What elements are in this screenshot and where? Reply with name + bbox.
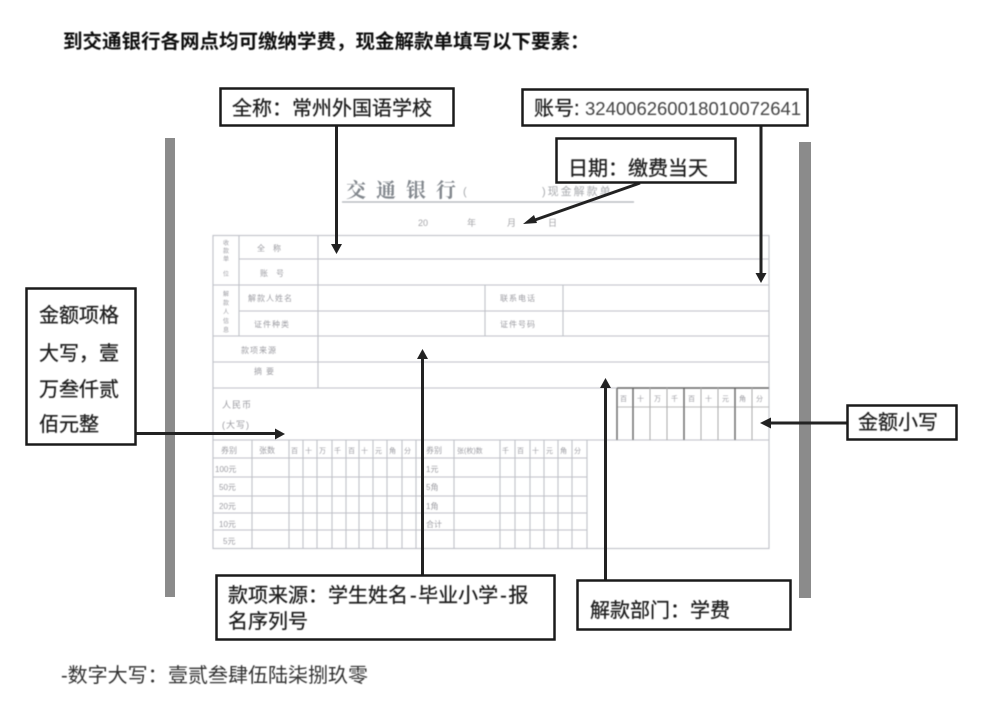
callout: payment department bbox=[578, 580, 790, 630]
form grid bbox=[213, 236, 769, 548]
form field labels: 百 bbox=[348, 447, 355, 455]
arrow: date bbox=[523, 183, 640, 224]
callout: amount in words: 大写，壹 bbox=[39, 342, 119, 365]
left gray bar bbox=[165, 138, 175, 597]
form field labels: (大写) bbox=[222, 419, 250, 430]
callout: account number: 账号: bbox=[534, 98, 580, 120]
form field labels: 十 bbox=[637, 394, 644, 403]
callout: account number: 324006260018010072641 bbox=[585, 98, 801, 119]
amount digit grid bbox=[617, 388, 769, 440]
form field labels: 款项来源 bbox=[241, 345, 277, 355]
arrow: account number bbox=[756, 126, 766, 283]
form field labels: 张数 bbox=[259, 445, 275, 455]
form field labels: 券别 bbox=[221, 445, 237, 455]
form field labels: 百 bbox=[517, 447, 524, 455]
form field labels: 解款人姓名 bbox=[248, 293, 293, 303]
callout: payment source: 款项来源：学生姓名-毕业小学-报 bbox=[228, 584, 528, 607]
form field labels bbox=[215, 239, 763, 546]
form field labels: 角 bbox=[389, 446, 396, 455]
right gray bar bbox=[799, 142, 811, 598]
arrow: payment source bbox=[417, 349, 428, 575]
callout: amount in words: 佰元整 bbox=[39, 413, 99, 436]
callout: payment source: 名序列号 bbox=[228, 610, 308, 633]
callout: account number bbox=[522, 90, 808, 126]
form heading: 日 bbox=[548, 218, 557, 228]
bank form bbox=[213, 174, 769, 548]
form field labels: 收 bbox=[223, 239, 229, 247]
form field labels: 十 bbox=[305, 446, 312, 455]
form field labels: 万 bbox=[319, 447, 326, 455]
form field labels: 款 bbox=[223, 247, 229, 255]
form heading bbox=[342, 174, 634, 228]
arrow: amount in figures bbox=[760, 418, 847, 428]
form field labels: 分 bbox=[756, 394, 763, 403]
form field labels: 单 bbox=[223, 255, 229, 263]
callout: amount in words: 金额项格 bbox=[39, 304, 119, 327]
form field labels: 元 bbox=[375, 447, 382, 455]
callout: full name: 全称：常州外国语学校 bbox=[232, 97, 432, 120]
form field labels: 券别 bbox=[426, 445, 442, 455]
form field labels: 全称 bbox=[257, 243, 289, 253]
arrow: full name bbox=[331, 126, 342, 254]
form field labels: 100元 bbox=[215, 465, 236, 474]
callout: amount in figures: 金额小写 bbox=[858, 411, 938, 434]
callout: full name bbox=[220, 88, 454, 126]
form field labels: 20元 bbox=[219, 502, 236, 511]
form field labels: 百 bbox=[291, 447, 298, 455]
callout: payment department: 解款部门：学费 bbox=[590, 599, 730, 622]
form field labels: 人 bbox=[223, 309, 229, 316]
form heading: 年 bbox=[467, 217, 476, 228]
arrow: amount in words bbox=[136, 428, 285, 440]
callout: date bbox=[556, 138, 736, 182]
form field labels: 联系电话 bbox=[500, 293, 536, 303]
form field labels: 分 bbox=[404, 446, 411, 455]
form field labels: 角 bbox=[739, 394, 746, 403]
footnote: -数字大写： bbox=[61, 665, 168, 687]
form field labels: 账号 bbox=[260, 269, 292, 278]
arrow: payment department bbox=[600, 378, 611, 580]
callout: payment source bbox=[216, 576, 554, 640]
form field labels: 角 bbox=[560, 446, 567, 455]
form field labels: 分 bbox=[574, 446, 581, 455]
form field labels: 千 bbox=[671, 394, 678, 403]
form heading: ( bbox=[463, 186, 467, 198]
title: 到交通银行各网点均可缴纳学费，现金解款单填写以下要素： bbox=[63, 30, 590, 53]
form field labels: 摘要 bbox=[254, 366, 278, 376]
form field labels: 十 bbox=[361, 446, 368, 455]
callout: amount in words bbox=[26, 288, 136, 444]
form field labels: 证件种类 bbox=[254, 319, 290, 329]
form field labels: 信 bbox=[223, 317, 229, 325]
form field labels: 十 bbox=[705, 394, 712, 403]
form field labels: 万 bbox=[654, 395, 661, 403]
form field labels: 合计 bbox=[426, 519, 442, 529]
form field labels: 百 bbox=[688, 395, 695, 403]
callout: amount in words: 万叁仟贰 bbox=[39, 378, 119, 401]
form field labels: 5元 bbox=[223, 537, 235, 546]
form field labels: 元 bbox=[722, 395, 729, 403]
form field labels: 5角 bbox=[426, 482, 438, 492]
form heading: 交通银行 bbox=[346, 174, 466, 203]
footnote: 壹贰叁肆伍陆柒捌玖零 bbox=[168, 664, 368, 687]
form field labels: 位 bbox=[223, 270, 229, 278]
form field labels: 人民币 bbox=[222, 400, 252, 410]
form field labels: 50元 bbox=[219, 483, 236, 492]
form field labels: 十 bbox=[532, 446, 539, 455]
form field labels: 千 bbox=[502, 446, 509, 455]
form field labels: 元 bbox=[546, 447, 553, 455]
form heading: )现金解款单 bbox=[542, 184, 613, 198]
callout: amount in figures bbox=[848, 406, 956, 440]
form field labels: 1角 bbox=[426, 501, 438, 511]
form field labels: 张(枚)数 bbox=[457, 446, 483, 455]
form field labels: 解 bbox=[223, 290, 229, 298]
form field labels: 息 bbox=[223, 326, 229, 334]
form field labels: 千 bbox=[334, 446, 341, 455]
form field labels: 1元 bbox=[426, 465, 438, 474]
form field labels: 10元 bbox=[219, 520, 236, 529]
callout: date: 日期：缴费当天 bbox=[568, 157, 708, 180]
form field labels: 证件号码 bbox=[500, 319, 536, 329]
form heading: 月 bbox=[507, 218, 516, 228]
form heading: 20 bbox=[418, 218, 428, 228]
form field labels: 百 bbox=[620, 395, 627, 403]
form field labels: 款 bbox=[223, 299, 229, 307]
